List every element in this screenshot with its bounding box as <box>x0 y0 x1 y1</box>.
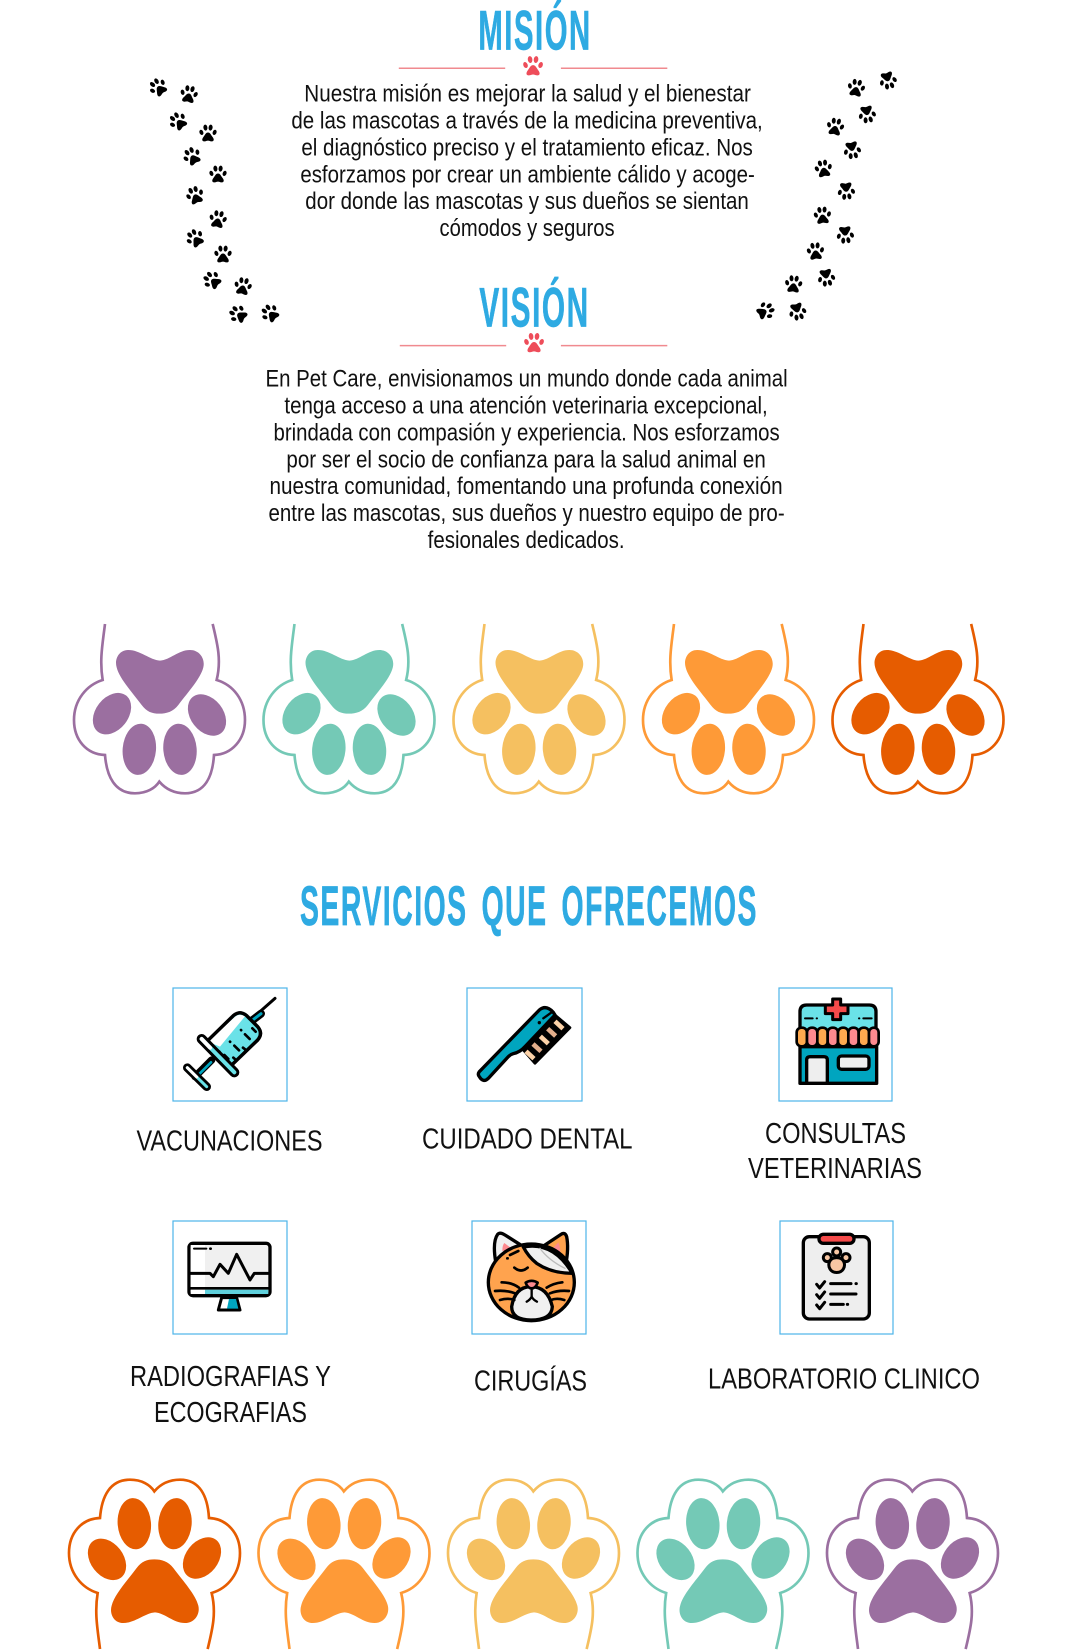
text block: misión: esforzamos por crear un ambiente cálido y acoge- <box>300 161 755 188</box>
text block: misión: el diagnóstico preciso y el tratamiento eficaz. Nos <box>301 134 753 161</box>
service: consultas veterinarias <box>748 988 922 1185</box>
service: cirugías <box>472 1221 587 1398</box>
text block: visión: tenga acceso a una atención veterinaria excepcional, <box>284 392 768 419</box>
label: radiografías y ecografías: ECOGRAFIAS <box>154 1397 307 1429</box>
text block: visión <box>266 365 788 554</box>
label: consultas veterinarias <box>748 1118 922 1185</box>
text block: visión: brindada con compasión y experiencia. Nos esforzamos <box>273 419 780 446</box>
paw row: bottom <box>69 1480 998 1649</box>
label: consultas veterinarias: CONSULTAS <box>765 1118 906 1150</box>
paw trail: left <box>145 74 283 327</box>
divider: Visión with red paw <box>400 333 667 352</box>
icon: veterinary shop <box>797 999 879 1083</box>
label: consultas veterinarias: VETERINARIAS <box>748 1153 922 1185</box>
text block: visión: entre las mascotas, sus dueños y nuestro equipo de pro- <box>269 500 785 527</box>
text block: visión: por ser el socio de confianza para la salud animal en <box>286 446 766 473</box>
service: laboratorio clínico <box>708 1221 980 1396</box>
text block: visión: nuestra comunidad, fomentando una profunda conexión <box>270 473 783 500</box>
label: cirugías: CIRUGÍAS <box>474 1364 587 1398</box>
text block: misión: dor donde las mascotas y sus dueños se sientan <box>305 188 749 215</box>
paw row: top <box>74 624 1003 793</box>
label: radiografías y ecografías <box>130 1361 331 1429</box>
icon: bandaged cat <box>488 1233 574 1321</box>
text block: misión: de las mascotas a través de la medicina preventiva, <box>291 107 763 134</box>
label: laboratorio clínico: LABORATORIO CLINICO <box>708 1364 980 1396</box>
text block: visión: fesionales dedicados. <box>428 527 625 554</box>
service: radiografías y ecografías <box>130 1221 331 1429</box>
label: cuidado dental: CUIDADO DENTAL <box>422 1124 632 1156</box>
label: vacunaciones: VACUNACIONES <box>136 1126 322 1158</box>
icon: syringe <box>187 998 275 1087</box>
label: radiografías y ecografías: RADIOGRAFIAS Y <box>130 1361 331 1393</box>
paw trail: right <box>754 70 899 323</box>
service: cuidado dental <box>422 988 632 1156</box>
text block: misión: Nuestra misión es mejorar la salud y el bienestar <box>304 81 751 108</box>
heading: Visión: VISIÓN <box>479 277 590 339</box>
icon: brush <box>478 1008 570 1080</box>
divider: Misión with red paw <box>399 56 667 75</box>
icon: monitor <box>189 1243 270 1310</box>
heading: Misión: MISIÓN <box>478 0 592 62</box>
text block: misión: cómodos y seguros <box>440 215 615 242</box>
text block: misión <box>291 81 763 242</box>
icon: clipboard <box>803 1234 869 1319</box>
service: vacunaciones <box>136 988 322 1158</box>
text block: visión: En Pet Care, envisionamos un mundo donde cada animal <box>266 365 788 392</box>
